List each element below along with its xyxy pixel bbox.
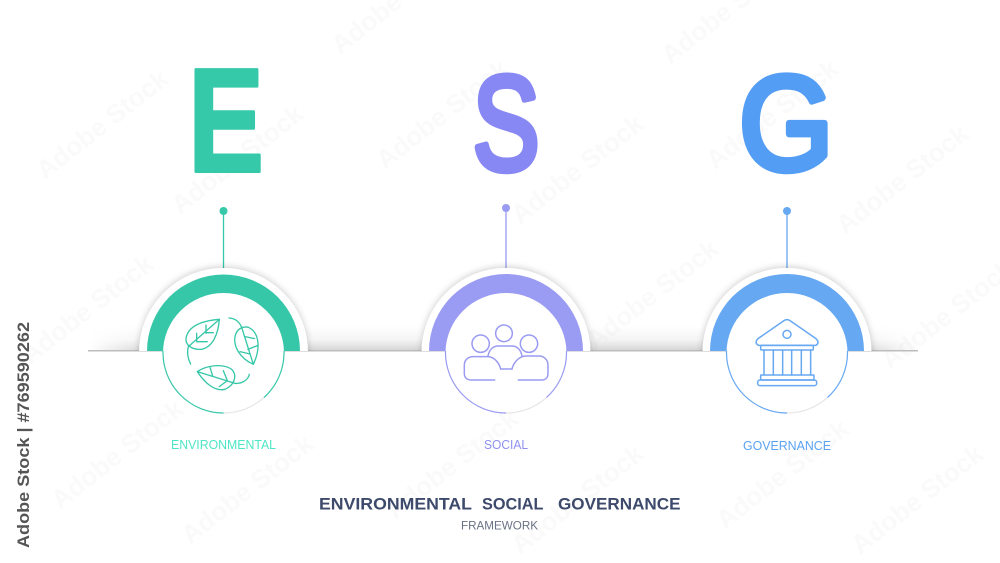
watermark pattern: Adobe Stock (45, 393, 189, 515)
title (319, 496, 680, 514)
connector pin: social (502, 204, 510, 268)
panel: environmental (139, 207, 308, 452)
watermark pattern: Adobe Stock (830, 118, 974, 240)
connector pin: governance (783, 207, 791, 268)
watermark pattern: Adobe Stock (370, 53, 514, 175)
watermark pattern: Adobe Stock (580, 233, 724, 355)
icon: government building (756, 320, 818, 386)
panel: social (422, 204, 590, 452)
connector pin: environmental (220, 207, 228, 268)
colored arc: social (429, 274, 583, 351)
watermark pattern: Adobe Stock (30, 63, 174, 185)
letter E: E (188, 37, 264, 203)
watermark pattern: Adobe Stock (505, 108, 649, 230)
raised white ring: social (418, 264, 594, 351)
icon circle: social (445, 293, 567, 413)
icon circle: governance (726, 293, 848, 413)
letter G: G (739, 49, 834, 199)
panel: governance (702, 207, 872, 453)
colored arc: governance (710, 274, 864, 351)
title: GOVERNANCE (558, 496, 680, 514)
title: SOCIAL (482, 496, 544, 514)
label: environmental: ENVIRONMENTAL (171, 437, 276, 452)
colored arc: environmental (147, 274, 300, 351)
raised white ring: governance (700, 264, 874, 351)
watermark pattern: Adobe Stock (175, 428, 319, 550)
label: governance: GOVERNANCE (743, 438, 831, 453)
icon circle: environmental (163, 293, 284, 413)
label: social: SOCIAL (484, 437, 528, 452)
watermark pattern: Adobe Stock (380, 403, 524, 525)
stock id caption: Adobe Stock | #769590262 (14, 322, 33, 548)
watermark pattern: Adobe Stock (165, 98, 309, 220)
watermark pattern: Adobe Stock (710, 413, 854, 535)
horizontal shelf (88, 338, 918, 352)
watermark pattern: Adobe Stock (505, 438, 649, 560)
title: ENVIRONMENTAL (319, 496, 472, 514)
icon: group of people (464, 325, 548, 380)
watermark pattern: Adobe Stock (845, 438, 989, 560)
subtitle: FRAMEWORK (461, 520, 538, 532)
letter S: S (473, 49, 540, 199)
watermark pattern: Adobe Stock (15, 248, 159, 370)
watermark pattern: Adobe Stock (700, 53, 844, 175)
icon: three leaves (186, 318, 258, 390)
raised white ring: environmental (136, 264, 311, 351)
